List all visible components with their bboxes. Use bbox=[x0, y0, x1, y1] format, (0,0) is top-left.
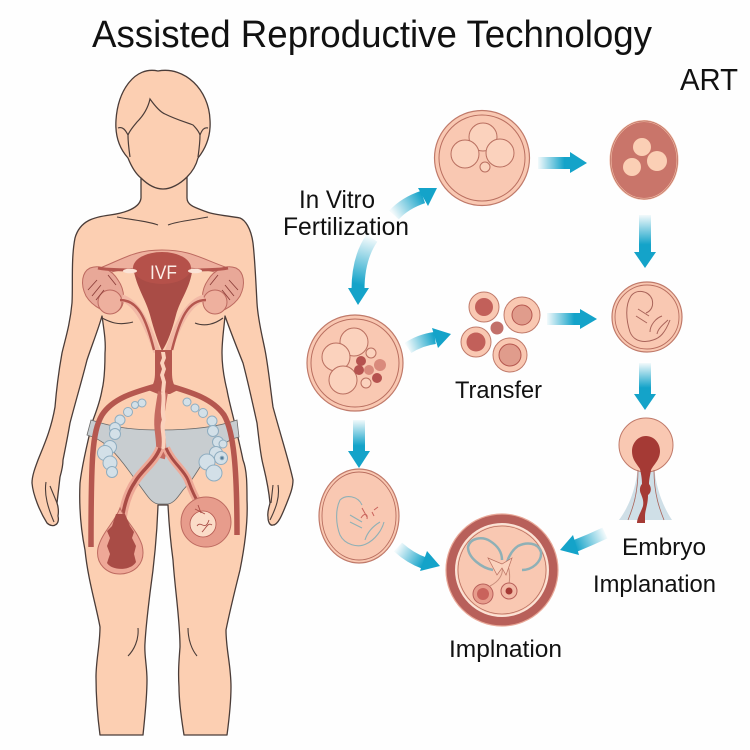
uterine cavity bbox=[133, 252, 191, 284]
cell: multi-cell with small dots bbox=[307, 315, 403, 411]
branch to right circle bbox=[166, 448, 198, 502]
label: Embryo Implanation: Implanation bbox=[593, 571, 716, 598]
arrow: down to fetus cell bbox=[348, 420, 370, 468]
left ovary bbox=[83, 267, 124, 312]
tube openings bbox=[123, 269, 202, 273]
left follicle chain bbox=[98, 399, 146, 478]
fallopian tubes bbox=[122, 298, 204, 352]
label: Embryo Implanation bbox=[593, 534, 716, 598]
label: Transfer: Transfer bbox=[455, 377, 542, 404]
cell: three pronuclei bbox=[434, 110, 530, 206]
reproductive organ group bbox=[83, 250, 243, 574]
arrow: down to embryo bbox=[634, 215, 656, 268]
central canal bbox=[159, 392, 163, 458]
label: In Vitro Fertilization: Fertilization bbox=[283, 213, 409, 241]
arrow: to top cell bbox=[394, 188, 437, 215]
human body figure bbox=[32, 70, 293, 735]
arrow: right to embryo bbox=[547, 309, 597, 329]
title: Assisted Reproductive Technology bbox=[92, 14, 652, 56]
label: In Vitro Fertilization bbox=[283, 186, 409, 241]
branch to left sac bbox=[122, 448, 160, 520]
cervix bbox=[148, 350, 178, 394]
uterus body bbox=[134, 264, 192, 351]
right follicle chain bbox=[183, 398, 228, 481]
arrow: to transfer cluster bbox=[408, 328, 451, 348]
collarbones, chest and knee lines bbox=[45, 217, 279, 656]
uterine upper arc bbox=[100, 250, 228, 275]
left sac bbox=[98, 508, 143, 574]
arrow: down to multi-cell bbox=[348, 238, 372, 305]
cell: fetus oval bbox=[319, 469, 399, 563]
label: Embryo Implanation: Embryo bbox=[622, 534, 706, 561]
hairline and ears bbox=[118, 99, 208, 157]
body silhouette bbox=[32, 176, 293, 735]
label: In Vitro Fertilization: In Vitro bbox=[299, 186, 375, 214]
horns and fimbriae bbox=[98, 268, 228, 272]
right ovary bbox=[202, 267, 243, 312]
IVF label: IVF bbox=[150, 263, 177, 284]
left sac inner lining bbox=[107, 514, 136, 569]
right circular sac with fetus bbox=[181, 497, 231, 547]
cell: implantation ring bbox=[446, 514, 558, 626]
arrow: right to dark cell bbox=[538, 152, 587, 173]
head bbox=[116, 70, 210, 189]
label: Implnation: Implnation bbox=[449, 636, 562, 663]
underwear bbox=[87, 420, 239, 504]
arrow: toward implantation from left bbox=[398, 547, 440, 571]
subtitle: ART: ART bbox=[680, 62, 738, 97]
arrow: toward implantation from right bbox=[560, 533, 605, 555]
arrow: down to flask bbox=[634, 363, 656, 410]
outer red vessels bbox=[91, 386, 237, 547]
cell: embryo bbox=[612, 282, 682, 352]
embryo implantation illustration bbox=[619, 418, 673, 523]
cell: dark oval with three spots bbox=[610, 121, 678, 199]
transfer cell cluster bbox=[461, 292, 540, 372]
